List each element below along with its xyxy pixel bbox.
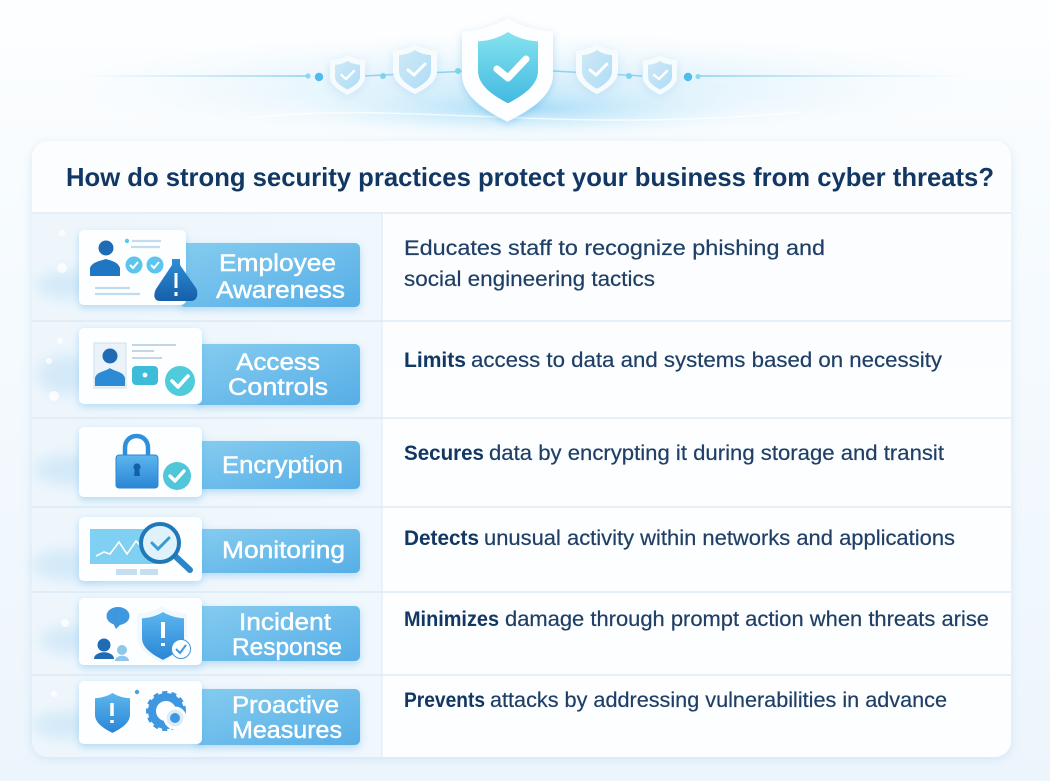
icon: small shield right [576, 44, 618, 94]
label bar: Monitoring [195, 529, 360, 573]
label bar: Encryption [195, 441, 360, 489]
label bar: Monitoring: Monitoring [222, 537, 345, 564]
icon: main shield with check [462, 18, 553, 122]
description: Proactive Measures: Prevents [404, 689, 485, 712]
label bar: Employee Awareness: Employee [219, 250, 336, 277]
description: Employee Awareness: Educates staff to recognize phishing and [404, 237, 825, 260]
row: Monitoring [79, 517, 955, 581]
icon card: ID badge with check [79, 328, 202, 404]
label bar: Access Controls [195, 344, 360, 405]
label bar: Employee Awareness [180, 243, 360, 307]
icon: small shield far left [330, 55, 365, 95]
description: Encryption: Secures [404, 442, 484, 465]
label bar: Employee Awareness: Awareness [216, 277, 345, 304]
label bar: Access Controls: Access [236, 349, 320, 376]
description: Access Controls: Limits [404, 349, 466, 372]
label bar: Incident Response: Incident [239, 609, 331, 636]
description: Employee Awareness: social engineering tactics [404, 268, 655, 291]
row: Employee Awareness [79, 230, 825, 307]
row: Access Controls [79, 328, 943, 405]
icon card: employee with warning [79, 230, 197, 305]
description: Employee Awareness [404, 237, 825, 291]
description: Incident Response: damage through prompt action when threats arise [505, 608, 989, 631]
description: Access Controls: access to data and systems based on necessity [471, 349, 943, 372]
label bar: Proactive Measures [195, 689, 360, 745]
description: Monitoring: Detects [404, 527, 479, 550]
label bar: Incident Response [195, 606, 360, 661]
label bar: Access Controls: Controls [228, 374, 328, 401]
icon card: dashboard with magnifier [79, 517, 202, 581]
label bar: Proactive Measures: Proactive [232, 692, 339, 719]
label bar: Proactive Measures: Measures [232, 717, 342, 744]
icon card: shield and gears [79, 681, 202, 744]
header shield banner [65, 18, 985, 143]
description: Incident Response: Minimizes [404, 608, 499, 631]
title: How do strong security practices protect your business from cyber threats? [66, 162, 994, 192]
description: Encryption: data by encrypting it during storage and transit [489, 442, 944, 465]
main panel [32, 141, 1011, 757]
icon: small shield far right [643, 55, 677, 95]
description: Monitoring: unusual activity within networks and applications [484, 527, 955, 550]
label bar: Encryption: Encryption [222, 452, 343, 479]
icon: small shield left [393, 44, 437, 94]
icon card: shield alert and team [79, 598, 202, 665]
icon card: padlock with check [79, 427, 202, 497]
row: Proactive Measures [79, 681, 947, 745]
row: Encryption [79, 427, 944, 497]
description: Proactive Measures: attacks by addressing vulnerabilities in advance [490, 689, 947, 712]
label bar: Incident Response: Response [232, 634, 342, 661]
row: Incident Response [79, 598, 989, 665]
